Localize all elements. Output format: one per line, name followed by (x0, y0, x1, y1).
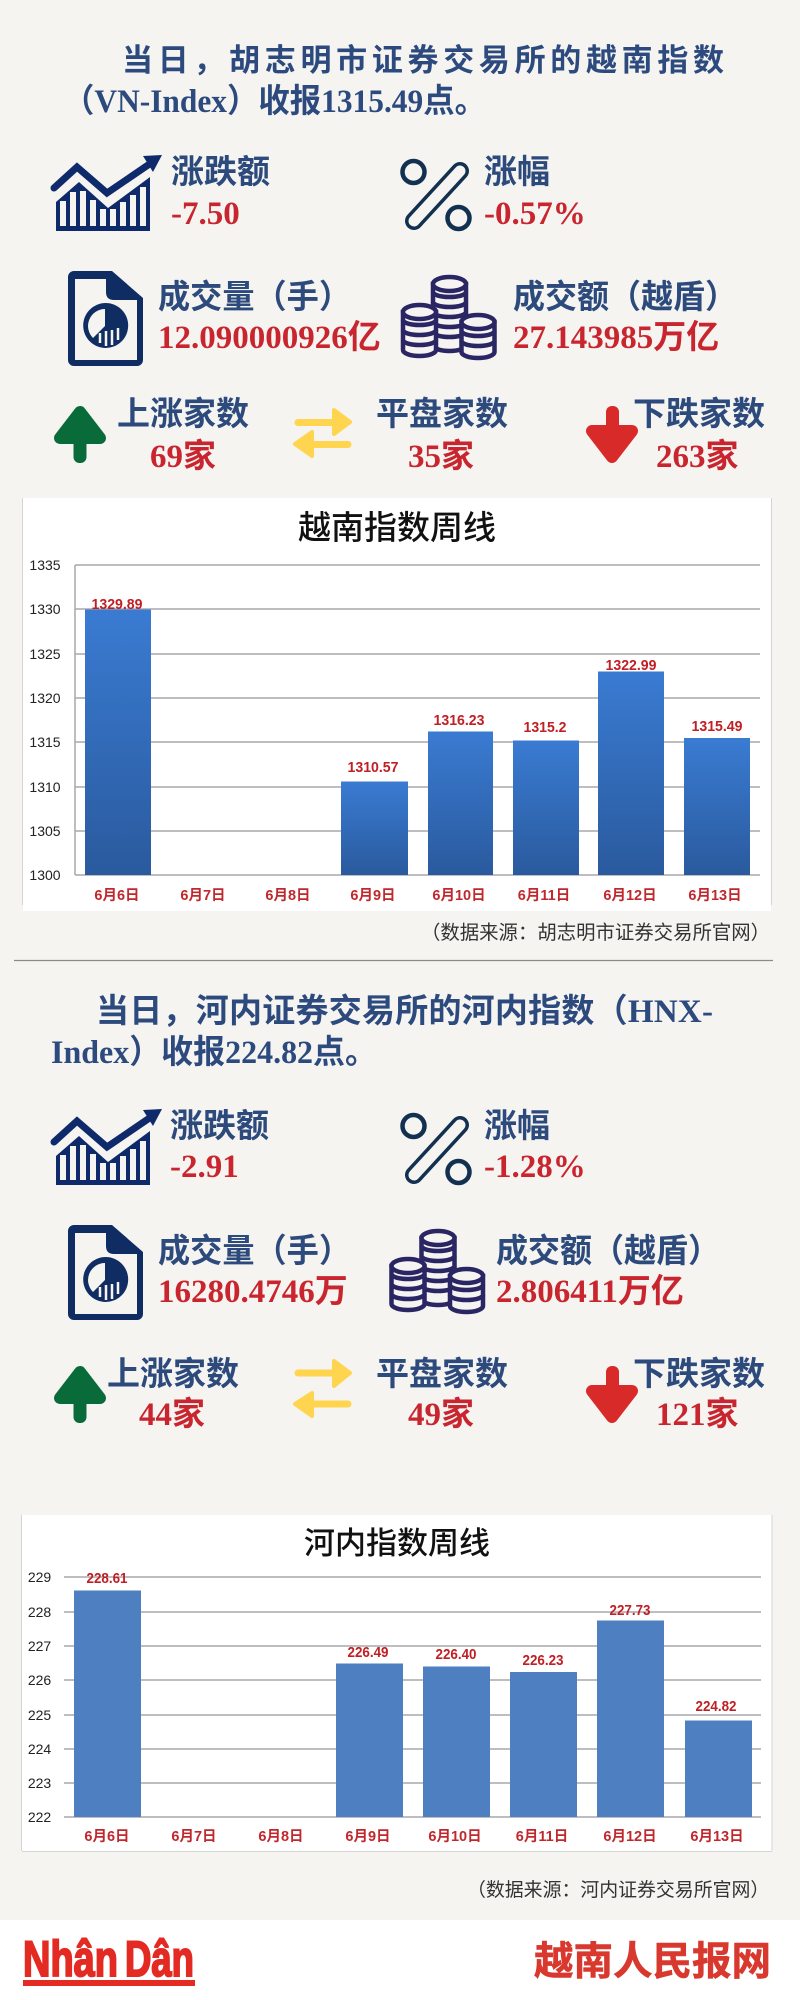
x axis labels: 6月11日 (516, 1829, 568, 1845)
data labels: 228.61 (86, 1570, 128, 1587)
label: 平盘家数 (376, 1347, 508, 1395)
gridlines and y axis: 1315 (29, 734, 61, 750)
heading: HNX-Index close (51, 993, 713, 1071)
data labels: 1315.2 (524, 719, 566, 736)
gridlines and y axis: 223 (28, 1775, 51, 1791)
x axis labels (84, 1829, 744, 1845)
x axis labels: 6月9日 (345, 1829, 391, 1845)
label: 上涨家数 (107, 1347, 239, 1395)
value: 121家 (656, 1396, 738, 1433)
logo: Nhan Dan: Dân (125, 1931, 194, 1987)
data labels: 1329.89 (92, 596, 142, 613)
metric: advancers (60, 387, 249, 475)
metric: unchanged (295, 387, 508, 475)
footer band (0, 1920, 800, 2000)
gridlines and y axis: 224 (28, 1741, 51, 1757)
icon: yellow swap arrows (295, 1361, 351, 1416)
label: 成交额（越盾） (496, 1224, 720, 1272)
data labels: 1310.57 (348, 759, 398, 776)
heading: VN-Index close: （VN-Index）收报1315.49点。 (63, 83, 486, 120)
x axis labels: 6月8日 (265, 888, 311, 904)
label: 下跌家数 (633, 387, 765, 435)
label: 成交额（越盾） (513, 270, 737, 318)
value: -2.91 (170, 1149, 239, 1185)
value: -0.57% (484, 196, 586, 232)
x axis labels: 6月8日 (258, 1829, 304, 1845)
metric: volume (68, 1224, 351, 1320)
gridlines and y axis (28, 1569, 761, 1825)
value: 2.806411万亿 (496, 1273, 684, 1310)
logo: Nhan Dan: Nhân (23, 1931, 118, 1987)
panel: HNX-Index section (22, 993, 772, 1902)
bars (74, 1590, 752, 1817)
label: 成交量（手） (158, 270, 351, 318)
metric: decliners (592, 387, 765, 475)
value: 35家 (408, 438, 474, 475)
metric: turnover (403, 270, 737, 358)
icon: document with pie chart (68, 1225, 143, 1320)
value: 49家 (408, 1396, 474, 1433)
x axis labels: 6月13日 (690, 1829, 744, 1845)
gridlines and y axis: 226 (28, 1672, 51, 1688)
x axis labels: 6月12日 (603, 1829, 657, 1845)
metric: change percent (402, 145, 586, 232)
icon: green up arrow (60, 1372, 100, 1423)
metric: turnover (392, 1224, 720, 1312)
gridlines and y axis: 229 (28, 1569, 51, 1585)
x axis labels: 6月10日 (428, 1829, 482, 1845)
gridlines and y axis: 1310 (29, 779, 61, 795)
gridlines and y axis: 225 (28, 1707, 51, 1723)
x axis labels: 6月6日 (84, 1829, 130, 1845)
x axis labels: 6月13日 (688, 888, 742, 904)
heading: HNX-Index close: 当日，河内证券交易所的河内指数（HNX- (96, 993, 713, 1030)
site name: 越南人民报网 (534, 1930, 771, 1987)
value: 12.090000926亿 (158, 319, 381, 356)
icon: coin stacks (403, 277, 494, 358)
label: 涨幅 (484, 1099, 550, 1147)
gridlines and y axis: 227 (28, 1638, 51, 1654)
heading: VN-Index close (63, 35, 724, 120)
x axis labels: 6月12日 (603, 888, 657, 904)
gridlines and y axis: 1325 (29, 646, 61, 662)
value: 263家 (656, 438, 738, 475)
icon: document with pie chart (68, 271, 143, 366)
panel: HNX-Index bar chart (22, 1515, 772, 1852)
gridlines and y axis (29, 557, 760, 883)
icon: coin stacks (392, 1231, 483, 1312)
label: 涨跌额 (171, 145, 270, 193)
value: 69家 (150, 438, 216, 475)
x axis labels: 6月7日 (171, 1829, 217, 1845)
x axis labels (94, 888, 742, 904)
data labels: 1315.49 (692, 718, 742, 735)
chart title: 河内指数周线 (304, 1518, 490, 1563)
heading: HNX-Index close: Index）收报224.82点。 (51, 1034, 377, 1071)
gridlines and y axis: 1335 (29, 557, 61, 573)
value: 27.143985万亿 (513, 319, 719, 356)
source note: （数据来源：河内证券交易所官网） (467, 1875, 769, 1902)
metric: decliners (592, 1347, 765, 1433)
icon: green up arrow (60, 412, 100, 463)
metric: advancers (60, 1347, 239, 1433)
x axis labels: 6月11日 (518, 888, 570, 904)
metric: change amount (54, 1099, 269, 1185)
data labels (86, 1570, 736, 1715)
data labels: 1316.23 (434, 712, 484, 729)
icon: percent (402, 1115, 470, 1183)
value: -1.28% (484, 1149, 586, 1185)
metric: change amount (54, 145, 270, 232)
icon: rising trend chart (54, 1109, 162, 1185)
x axis labels: 6月10日 (432, 888, 486, 904)
value: -7.50 (171, 196, 240, 232)
data labels: 1322.99 (606, 657, 656, 674)
heading: VN-Index close: 当日，胡志明市证券交易所的越南指数 (122, 35, 724, 80)
chart title: 越南指数周线 (298, 501, 496, 549)
gridlines and y axis: 1305 (29, 823, 61, 839)
x axis labels: 6月7日 (180, 888, 226, 904)
gridlines and y axis: 1300 (29, 867, 61, 883)
gridlines and y axis: 228 (28, 1604, 51, 1620)
label: 涨跌额 (170, 1099, 269, 1147)
gridlines and y axis: 1330 (29, 601, 61, 617)
panel: VN-Index section (22, 35, 772, 945)
x axis labels: 6月6日 (94, 888, 140, 904)
data labels: 226.40 (436, 1646, 476, 1663)
metric: change percent (402, 1099, 586, 1185)
icon: percent (402, 161, 470, 229)
gridlines and y axis: 222 (28, 1809, 51, 1825)
label: 涨幅 (484, 145, 550, 193)
source note: （数据来源：胡志明市证券交易所官网） (421, 916, 770, 945)
value: 44家 (139, 1396, 205, 1433)
icon: red down arrow (592, 406, 632, 457)
label: 成交量（手） (158, 1224, 351, 1272)
metric: unchanged (295, 1347, 508, 1433)
value: 16280.4746万 (158, 1274, 348, 1310)
data labels: 224.82 (696, 1698, 736, 1715)
metric: volume (68, 270, 381, 366)
data labels: 227.73 (610, 1602, 650, 1619)
label: 下跌家数 (633, 1347, 765, 1395)
icon: yellow swap arrows (295, 410, 351, 456)
gridlines and y axis: 1320 (29, 690, 61, 706)
icon: red down arrow (592, 1366, 632, 1417)
x axis labels: 6月9日 (350, 888, 396, 904)
panel: VN-Index bar chart (22, 498, 772, 911)
icon: rising trend chart (54, 155, 162, 231)
data labels: 226.49 (348, 1644, 388, 1661)
data labels: 226.23 (522, 1652, 564, 1669)
label: 上涨家数 (117, 387, 249, 435)
label: 平盘家数 (376, 387, 508, 435)
data labels (92, 596, 742, 776)
bars (85, 610, 750, 875)
